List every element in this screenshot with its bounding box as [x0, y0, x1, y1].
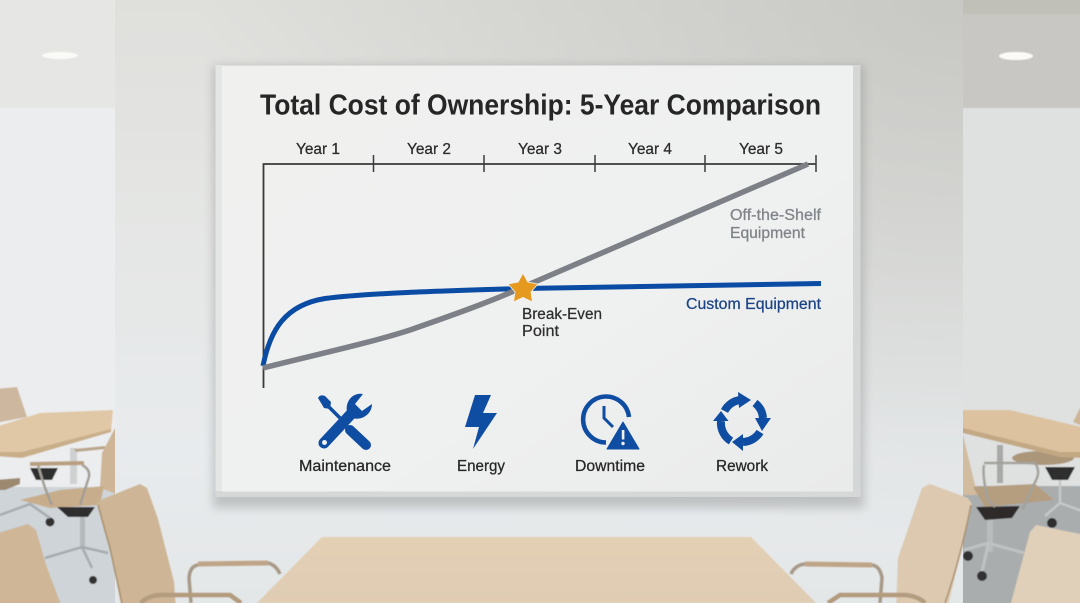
label: off-the-shelf equipment — [730, 207, 822, 242]
label: off-the-shelf equipment: Off-the-Shelf — [730, 207, 822, 224]
foreground: lower left chair — [0, 524, 63, 603]
label: break-even point: Point — [522, 323, 560, 340]
year labels: Year 1 — [296, 141, 340, 158]
foreground: centre table — [257, 537, 816, 603]
chart line: off-the-shelf equipment — [263, 164, 808, 368]
title: Total Cost of Ownership: 5-Year Comparison — [260, 90, 821, 122]
foreground: lower right chair — [1009, 525, 1080, 603]
year labels: Year 2 — [407, 141, 451, 158]
year labels: Year 3 — [518, 141, 562, 158]
icon: downtime clock with warning — [583, 397, 639, 449]
label: break-even point — [522, 306, 602, 340]
panel: whiteboard frame — [216, 65, 860, 497]
chart: axes with year scale — [264, 141, 816, 388]
label: downtime: Downtime — [575, 458, 645, 475]
label: break-even point: Break-Even — [522, 306, 602, 323]
icon: break-even star — [508, 273, 538, 302]
background: left room view — [0, 52, 115, 603]
icon: maintenance — [318, 394, 372, 445]
icon: energy bolt — [465, 395, 497, 449]
foreground: right chair — [791, 484, 972, 603]
label: custom equipment: Custom Equipment — [686, 296, 822, 313]
label: energy: Energy — [457, 458, 505, 475]
label: off-the-shelf equipment: Equipment — [730, 225, 806, 242]
foreground: left chair — [97, 484, 280, 603]
year labels: Year 4 — [628, 141, 672, 158]
background: right room view — [955, 0, 1080, 603]
background: central wall — [115, 0, 963, 603]
year labels — [296, 141, 783, 158]
label: maintenance: Maintenance — [299, 458, 391, 475]
icon: rework cycle arrows — [713, 392, 771, 451]
label: rework: Rework — [716, 458, 768, 475]
board shadow — [213, 66, 864, 508]
year labels: Year 5 — [739, 141, 783, 158]
chart line: custom equipment — [263, 284, 821, 366]
